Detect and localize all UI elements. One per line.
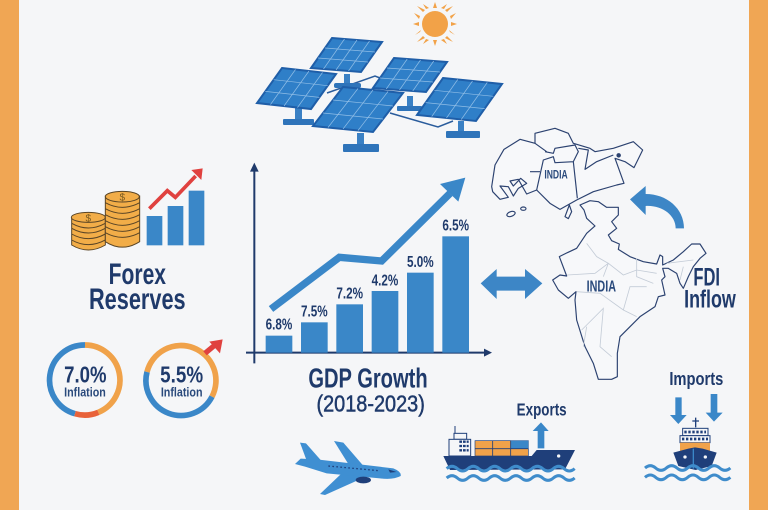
- panel: left: [257, 68, 336, 125]
- bottom transport row: [295, 368, 730, 495]
- right border: [749, 0, 768, 510]
- icon: sun: [413, 2, 457, 46]
- forex reserves block: [50, 168, 223, 416]
- map group: [481, 128, 736, 379]
- arrows: imports down: [670, 394, 723, 424]
- left border: [0, 0, 19, 510]
- icon: rising bars: [147, 191, 204, 245]
- label: exports: Exports: [517, 400, 567, 420]
- panel: center: [313, 87, 403, 152]
- map: india: [553, 201, 706, 379]
- map: upper region: [492, 128, 643, 219]
- ring: 5.5% inflation: [146, 339, 223, 416]
- icon: export ship: [443, 426, 575, 480]
- map label: upper india: INDIA: [544, 167, 568, 181]
- bar labels: 7.5%: [301, 304, 328, 321]
- heading: reserves: Reserves: [89, 283, 186, 316]
- chart axes: [246, 163, 492, 363]
- solar panels: [257, 38, 502, 152]
- ring: 7.0% inflation: 7.0%: [64, 361, 106, 387]
- arrow: double headed: [481, 269, 542, 299]
- heading: fdi: FDI: [693, 264, 720, 292]
- heading: years: (2018-2023): [316, 391, 425, 417]
- arrow: exports up: [533, 422, 549, 448]
- icon: plane: [295, 441, 401, 495]
- coin symbols: [86, 192, 126, 224]
- bar labels: 6.5%: [442, 218, 469, 235]
- ring: 7.0% inflation: [50, 345, 120, 415]
- ring: 7.0% inflation: Inflation: [64, 385, 106, 400]
- bar labels: 5.0%: [407, 254, 434, 271]
- bar labels: 6.8%: [266, 316, 293, 333]
- coin symbols: $: [86, 213, 92, 224]
- panel: rear right: [373, 58, 447, 111]
- label: imports: Imports: [669, 368, 723, 389]
- map label: india: INDIA: [587, 279, 616, 296]
- coin symbols: $: [120, 192, 126, 203]
- heading: gdp growth: GDP Growth: [308, 363, 428, 394]
- icon: red arrow: [149, 168, 203, 209]
- ring: 5.5% inflation: Inflation: [161, 385, 202, 400]
- bars: [266, 236, 469, 353]
- heading: forex: Forex: [109, 258, 166, 291]
- bar labels: [266, 218, 469, 333]
- bar labels: 7.2%: [336, 286, 363, 303]
- chart: gdp growth: [246, 163, 492, 417]
- panel: far right: [417, 78, 502, 138]
- icon: coins: [71, 191, 140, 250]
- bar labels: 4.2%: [372, 273, 399, 290]
- ring: 5.5% inflation: 5.5%: [160, 361, 203, 387]
- trend arrow: [271, 178, 465, 309]
- heading: inflow: Inflow: [684, 286, 736, 314]
- arrow: curved fdi: [630, 186, 684, 228]
- panel: back: [311, 38, 382, 88]
- icon: import ship: [645, 418, 730, 480]
